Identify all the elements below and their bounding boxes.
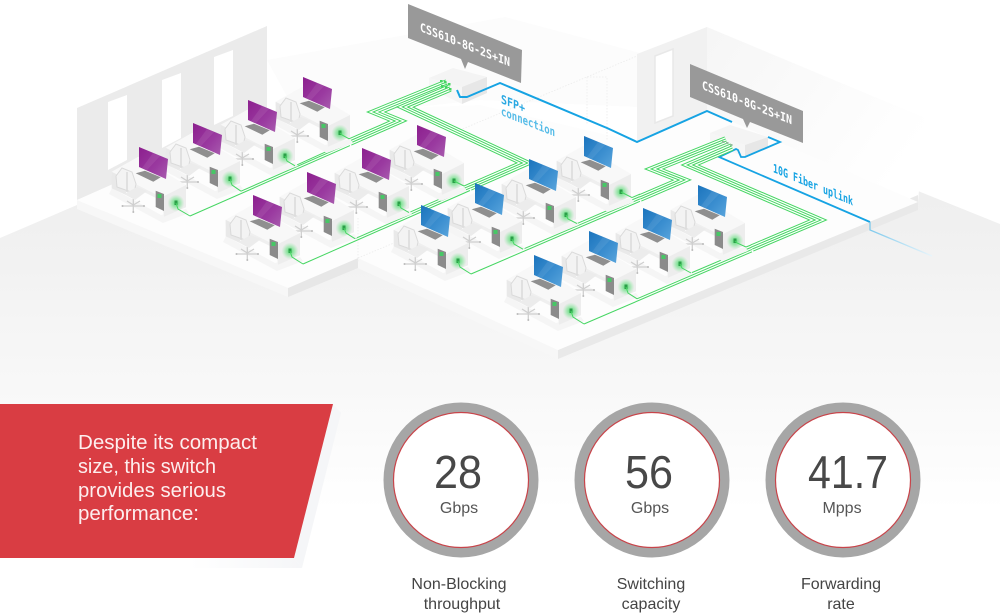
green cables: blue row 2 <box>584 147 818 324</box>
metric: forwarding rate: Mpps <box>822 500 862 517</box>
metric: non-blocking throughput: Non-Blocking <box>411 576 507 593</box>
workstations: purple row 1 <box>109 77 353 223</box>
metric: non-blocking throughput <box>388 408 534 613</box>
workstation <box>223 195 303 271</box>
callout: switch 1 label <box>408 4 522 83</box>
workstation <box>391 205 471 281</box>
cable bundle 2 to switch 1 <box>405 88 525 187</box>
cable drops from desk outlets <box>176 133 746 324</box>
statement text: performance: <box>78 503 199 525</box>
faint room outlines <box>358 56 637 262</box>
label: SFP+ connection: SFP+ <box>501 91 525 116</box>
switch port LEDs <box>440 80 732 146</box>
statement text: Despite its compact <box>78 432 257 454</box>
workstation <box>163 123 243 199</box>
statement text: size, this switch <box>78 456 216 478</box>
wall with window, right room <box>637 27 707 142</box>
workstation <box>668 185 748 261</box>
metric: forwarding rate <box>770 408 916 613</box>
workstation <box>332 148 412 224</box>
window 1 <box>108 95 127 170</box>
building walls <box>77 17 925 202</box>
cable bundle to switch 1 <box>350 83 447 142</box>
workstations: purple row 2 <box>223 125 467 271</box>
label: 10G Fiber uplink: 10G Fiber uplink <box>773 160 853 209</box>
metric: forwarding rate: Forwarding <box>801 576 881 593</box>
workstation <box>277 172 357 248</box>
callout: switch 1 label: CSS610-8G-2S+IN <box>420 19 510 69</box>
switch 2 <box>710 125 768 157</box>
metric: switching capacity: Switching <box>617 576 685 593</box>
callout: switch 2 label <box>690 64 803 143</box>
metric: switching capacity <box>580 408 724 613</box>
workstation <box>499 159 579 235</box>
workstation <box>559 231 639 307</box>
green cables: blue row 1 <box>471 140 726 274</box>
metric: non-blocking throughput: 28 <box>434 446 482 498</box>
metric: non-blocking throughput: throughput <box>424 596 501 613</box>
workstations: blue row 2 <box>504 185 748 331</box>
statement text: provides serious <box>78 480 226 502</box>
workstations: blue row 1 <box>391 136 634 281</box>
workstation <box>273 77 353 153</box>
window 2 <box>162 73 181 148</box>
workstation <box>504 255 584 331</box>
cable bundle to switch 2 <box>640 140 726 198</box>
workstation <box>109 147 189 223</box>
workstation <box>445 183 525 259</box>
window 3 <box>214 50 233 125</box>
switch 1 <box>429 68 487 104</box>
workstation <box>387 125 467 201</box>
workstation <box>554 136 634 212</box>
workstation <box>613 208 693 284</box>
green cables: purple row 2 <box>303 88 525 264</box>
workstation <box>218 100 298 176</box>
green cables: purple row 1 <box>190 83 447 216</box>
back wall, far room <box>267 17 707 120</box>
metric: non-blocking throughput: Gbps <box>440 500 478 517</box>
metric: switching capacity: capacity <box>622 596 680 613</box>
metric: forwarding rate: rate <box>827 596 855 613</box>
window, right room <box>655 49 673 123</box>
blue fiber uplink line <box>719 137 932 256</box>
panel: red statement <box>0 404 341 568</box>
floor platform <box>77 105 918 359</box>
ground plane <box>0 191 1000 520</box>
left wall <box>77 26 267 200</box>
label: SFP+ connection: connection <box>501 103 555 139</box>
metric: switching capacity: Gbps <box>631 500 669 517</box>
callout: switch 2 label: CSS610-8G-2S+IN <box>702 77 792 127</box>
metric: forwarding rate: 41.7 <box>808 446 888 498</box>
cable bundle 2 to switch 2 <box>690 147 818 248</box>
metric: switching capacity: 56 <box>625 446 673 498</box>
statement text <box>78 432 257 525</box>
right outer wall <box>707 27 925 202</box>
blue SFP+ connection line <box>457 83 732 142</box>
label: SFP+ connection <box>501 91 555 139</box>
